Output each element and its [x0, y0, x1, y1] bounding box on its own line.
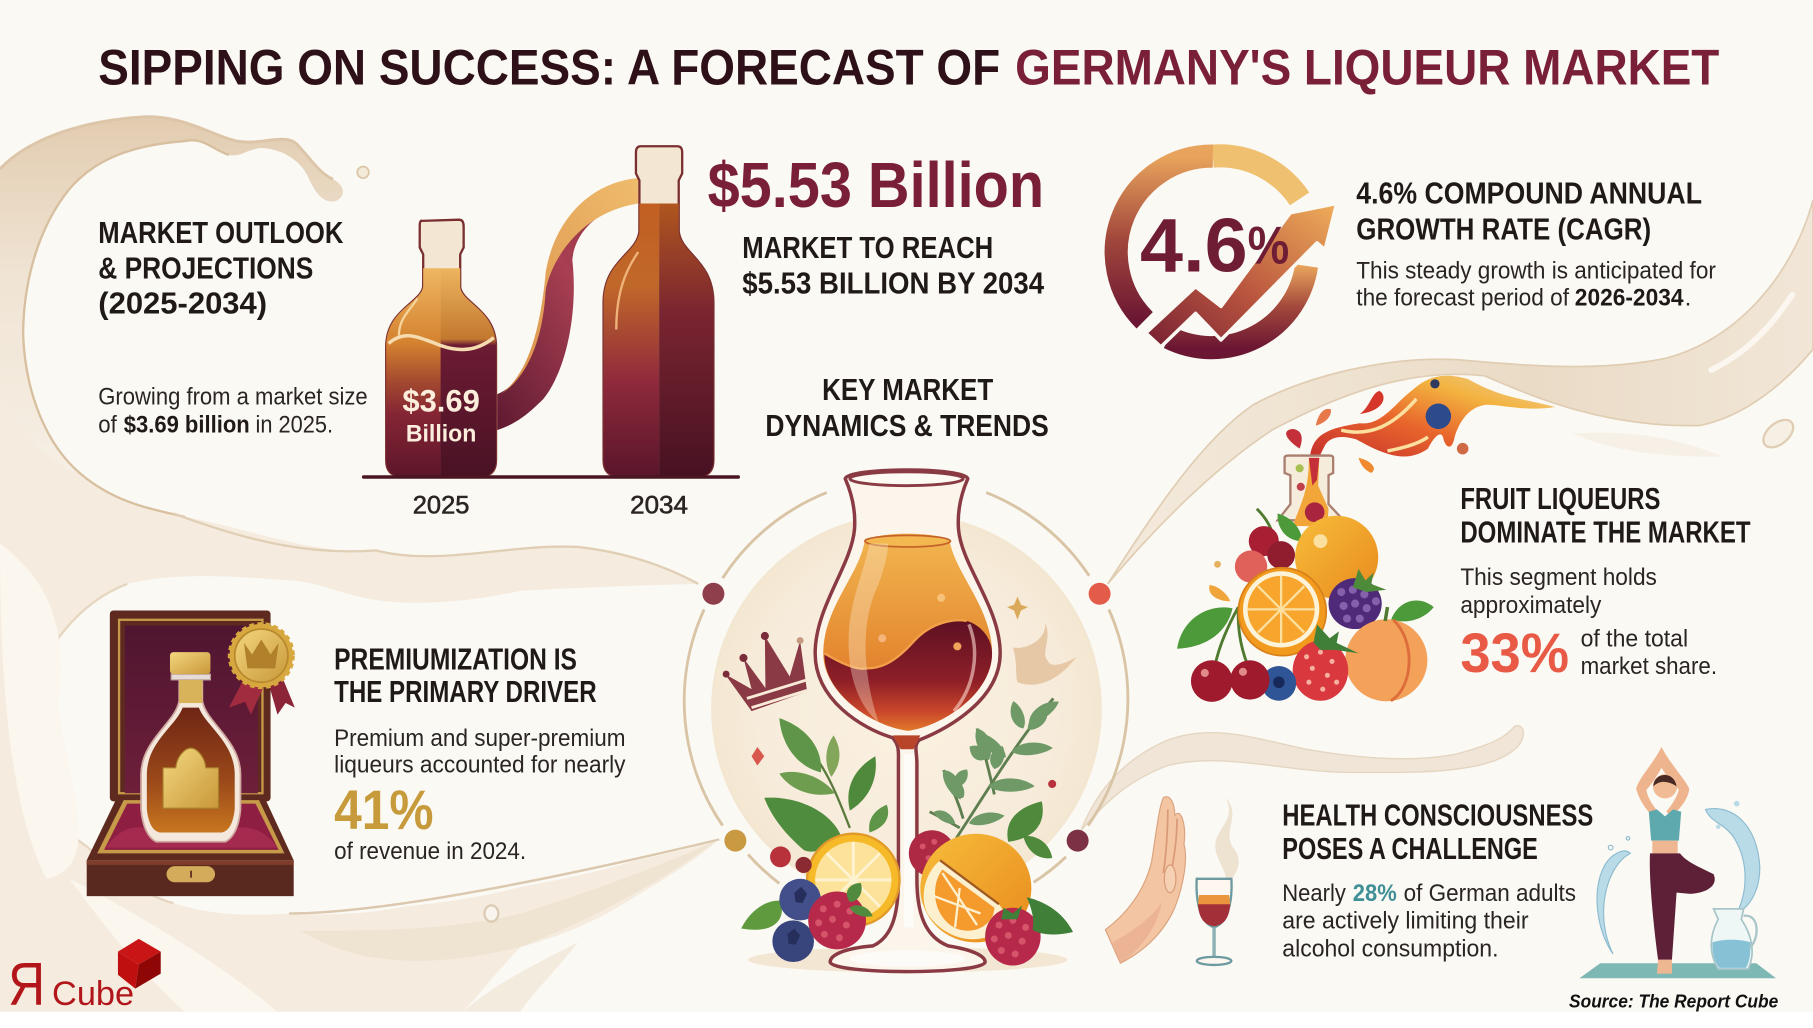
- value 4.6%: %: [1248, 217, 1289, 276]
- panel: premiumization text: liqueurs accounted for nearly: [334, 751, 626, 778]
- panel: fruit text: of the total: [1581, 625, 1688, 652]
- ribbon linking bottles: [497, 178, 638, 430]
- water pitcher: [1711, 909, 1757, 969]
- swirl: right lower cream wave: [1081, 726, 1523, 830]
- midriff: [1652, 841, 1678, 853]
- panel: market outlook text: $3.69 billion: [124, 411, 250, 438]
- panel: fruit text: This segment holds: [1460, 564, 1657, 591]
- gift box lid: [110, 611, 271, 801]
- pour stream: [1286, 376, 1555, 473]
- icon: small glass with smoke: [1197, 798, 1239, 965]
- mat: [1579, 963, 1776, 978]
- panel: fruit text: [1460, 482, 1751, 684]
- fruit left: [741, 834, 900, 962]
- panel: fruit text: market share.: [1581, 653, 1717, 680]
- panel: premiumization text: Premium and super-premium: [334, 725, 626, 752]
- splash: [1013, 623, 1076, 685]
- water arcs: [1597, 851, 1630, 954]
- leaves left: [764, 718, 888, 852]
- panel: market outlook text: & PROJECTIONS: [98, 252, 313, 286]
- icon: yoga figure with water: [1579, 747, 1776, 978]
- bottom white strip: [0, 1012, 1813, 1028]
- panel: premiumization text: PREMIUMIZATION IS: [334, 643, 577, 677]
- panel: premiumization text: THE PRIMARY DRIVER: [334, 675, 597, 709]
- value label 2025: [402, 384, 480, 448]
- value 4.6%: 4.6: [1140, 204, 1248, 289]
- axis baseline: [362, 475, 740, 479]
- source note: Source: The Report Cube: [1569, 991, 1778, 1012]
- title: [98, 39, 1719, 95]
- stat 41%: 41%: [334, 779, 434, 841]
- gift box base: [87, 796, 294, 896]
- flask: [1278, 456, 1344, 526]
- panel: premiumization illustration: [87, 611, 295, 896]
- leggings: [1650, 853, 1715, 960]
- title: GERMANY'S LIQUEUR MARKET: [1015, 39, 1719, 95]
- logo text: [8, 951, 134, 1018]
- text: market to reach: MARKET TO REACH: [742, 231, 993, 265]
- logo text: Я: [8, 951, 45, 1018]
- swirl: right upper cream wave: [1108, 200, 1813, 584]
- big value: $5.53 Billion: $5.53 Billion: [708, 150, 1044, 221]
- text: CAGR: 4.6% COMPOUND ANNUAL: [1356, 177, 1702, 211]
- text: market to reach: [742, 231, 1044, 301]
- value label 2025: $3.69: [402, 384, 480, 419]
- year label 2025: 2025: [413, 491, 469, 519]
- panel: health text: POSES A CHALLENGE: [1282, 832, 1538, 866]
- panel: health text: [1282, 799, 1593, 962]
- backdrop disc: [711, 513, 1102, 904]
- text: CAGR: .: [1685, 284, 1691, 311]
- panel: health text: Nearly: [1282, 880, 1347, 907]
- sparkle: [1007, 597, 1028, 620]
- text: CAGR: the forecast period of: [1356, 284, 1569, 311]
- ring with connectors: [684, 493, 1128, 883]
- panel: fruit text: approximately: [1460, 592, 1602, 619]
- value label 2025: Billion: [406, 421, 476, 448]
- text: market to reach: $5.53 BILLION BY 2034: [742, 267, 1044, 301]
- title: SIPPING ON SUCCESS: A FORECAST OF: [98, 39, 1000, 95]
- bottle 2034: [604, 146, 713, 476]
- chart: bottle growth 2025 to 2034: [362, 146, 740, 519]
- panel: market outlook text: Growing from a market size: [98, 384, 368, 411]
- small diamond: [752, 747, 764, 765]
- glass: [815, 470, 1000, 972]
- bottle 2025: [386, 220, 496, 476]
- arms: [1636, 747, 1689, 816]
- panel: market outlook text: MARKET OUTLOOK: [98, 216, 343, 250]
- herbs right: [930, 696, 1062, 858]
- panel: market outlook text: [98, 216, 368, 438]
- swirl decorations: droplets: [357, 167, 498, 922]
- medal: [229, 624, 295, 715]
- fruit cluster: [1177, 509, 1434, 702]
- panel: market outlook text: (2025-2034): [98, 286, 267, 320]
- panel: health text: HEALTH CONSCIOUSNESS: [1282, 799, 1593, 833]
- chart: CAGR ring: [1116, 156, 1337, 348]
- heading: key market dynamics: DYNAMICS & TRENDS: [765, 409, 1049, 443]
- text: CAGR: This steady growth is anticipated for: [1356, 258, 1716, 285]
- icon: stop hand: [1105, 797, 1185, 963]
- panel: health text: alcohol consumption.: [1282, 935, 1499, 962]
- logo: RCube: [8, 939, 161, 1018]
- node dots: [702, 583, 1111, 852]
- panel: health text: are actively limiting their: [1282, 908, 1529, 935]
- panel: market outlook text: of: [98, 411, 117, 438]
- central glass illustration: [684, 470, 1128, 972]
- heading: key market dynamics: KEY MARKET: [822, 373, 993, 407]
- arrow: [1146, 204, 1337, 347]
- heading: key market dynamics: [765, 373, 1049, 443]
- panel: fruit text: FRUIT LIQUEURS: [1460, 482, 1660, 516]
- text: CAGR: 2026-2034: [1575, 284, 1684, 311]
- logo cube: [118, 939, 161, 989]
- stat 33%: 33%: [1460, 622, 1569, 684]
- panel: health text: 28%: [1353, 880, 1397, 907]
- panel: market outlook text: in 2025.: [256, 411, 333, 438]
- panel: fruit illustration: [1177, 376, 1555, 702]
- foot: [1657, 960, 1672, 974]
- fruit right: [909, 830, 1073, 966]
- panel: premiumization text: [334, 643, 626, 865]
- swirl: left cream wave: [0, 117, 719, 1012]
- text: CAGR: [1356, 177, 1716, 311]
- head: [1653, 774, 1677, 798]
- panel: health text: of German adults: [1404, 880, 1576, 907]
- year label 2034: 2034: [630, 491, 688, 519]
- crown: [723, 632, 807, 711]
- cognac bottle: [141, 652, 240, 842]
- panel: premiumization text: of revenue in 2024.: [334, 838, 526, 865]
- logo text: Cube: [52, 975, 134, 1013]
- text: CAGR: GROWTH RATE (CAGR): [1356, 212, 1651, 246]
- top: [1649, 809, 1681, 841]
- glass shadow: [748, 947, 1067, 972]
